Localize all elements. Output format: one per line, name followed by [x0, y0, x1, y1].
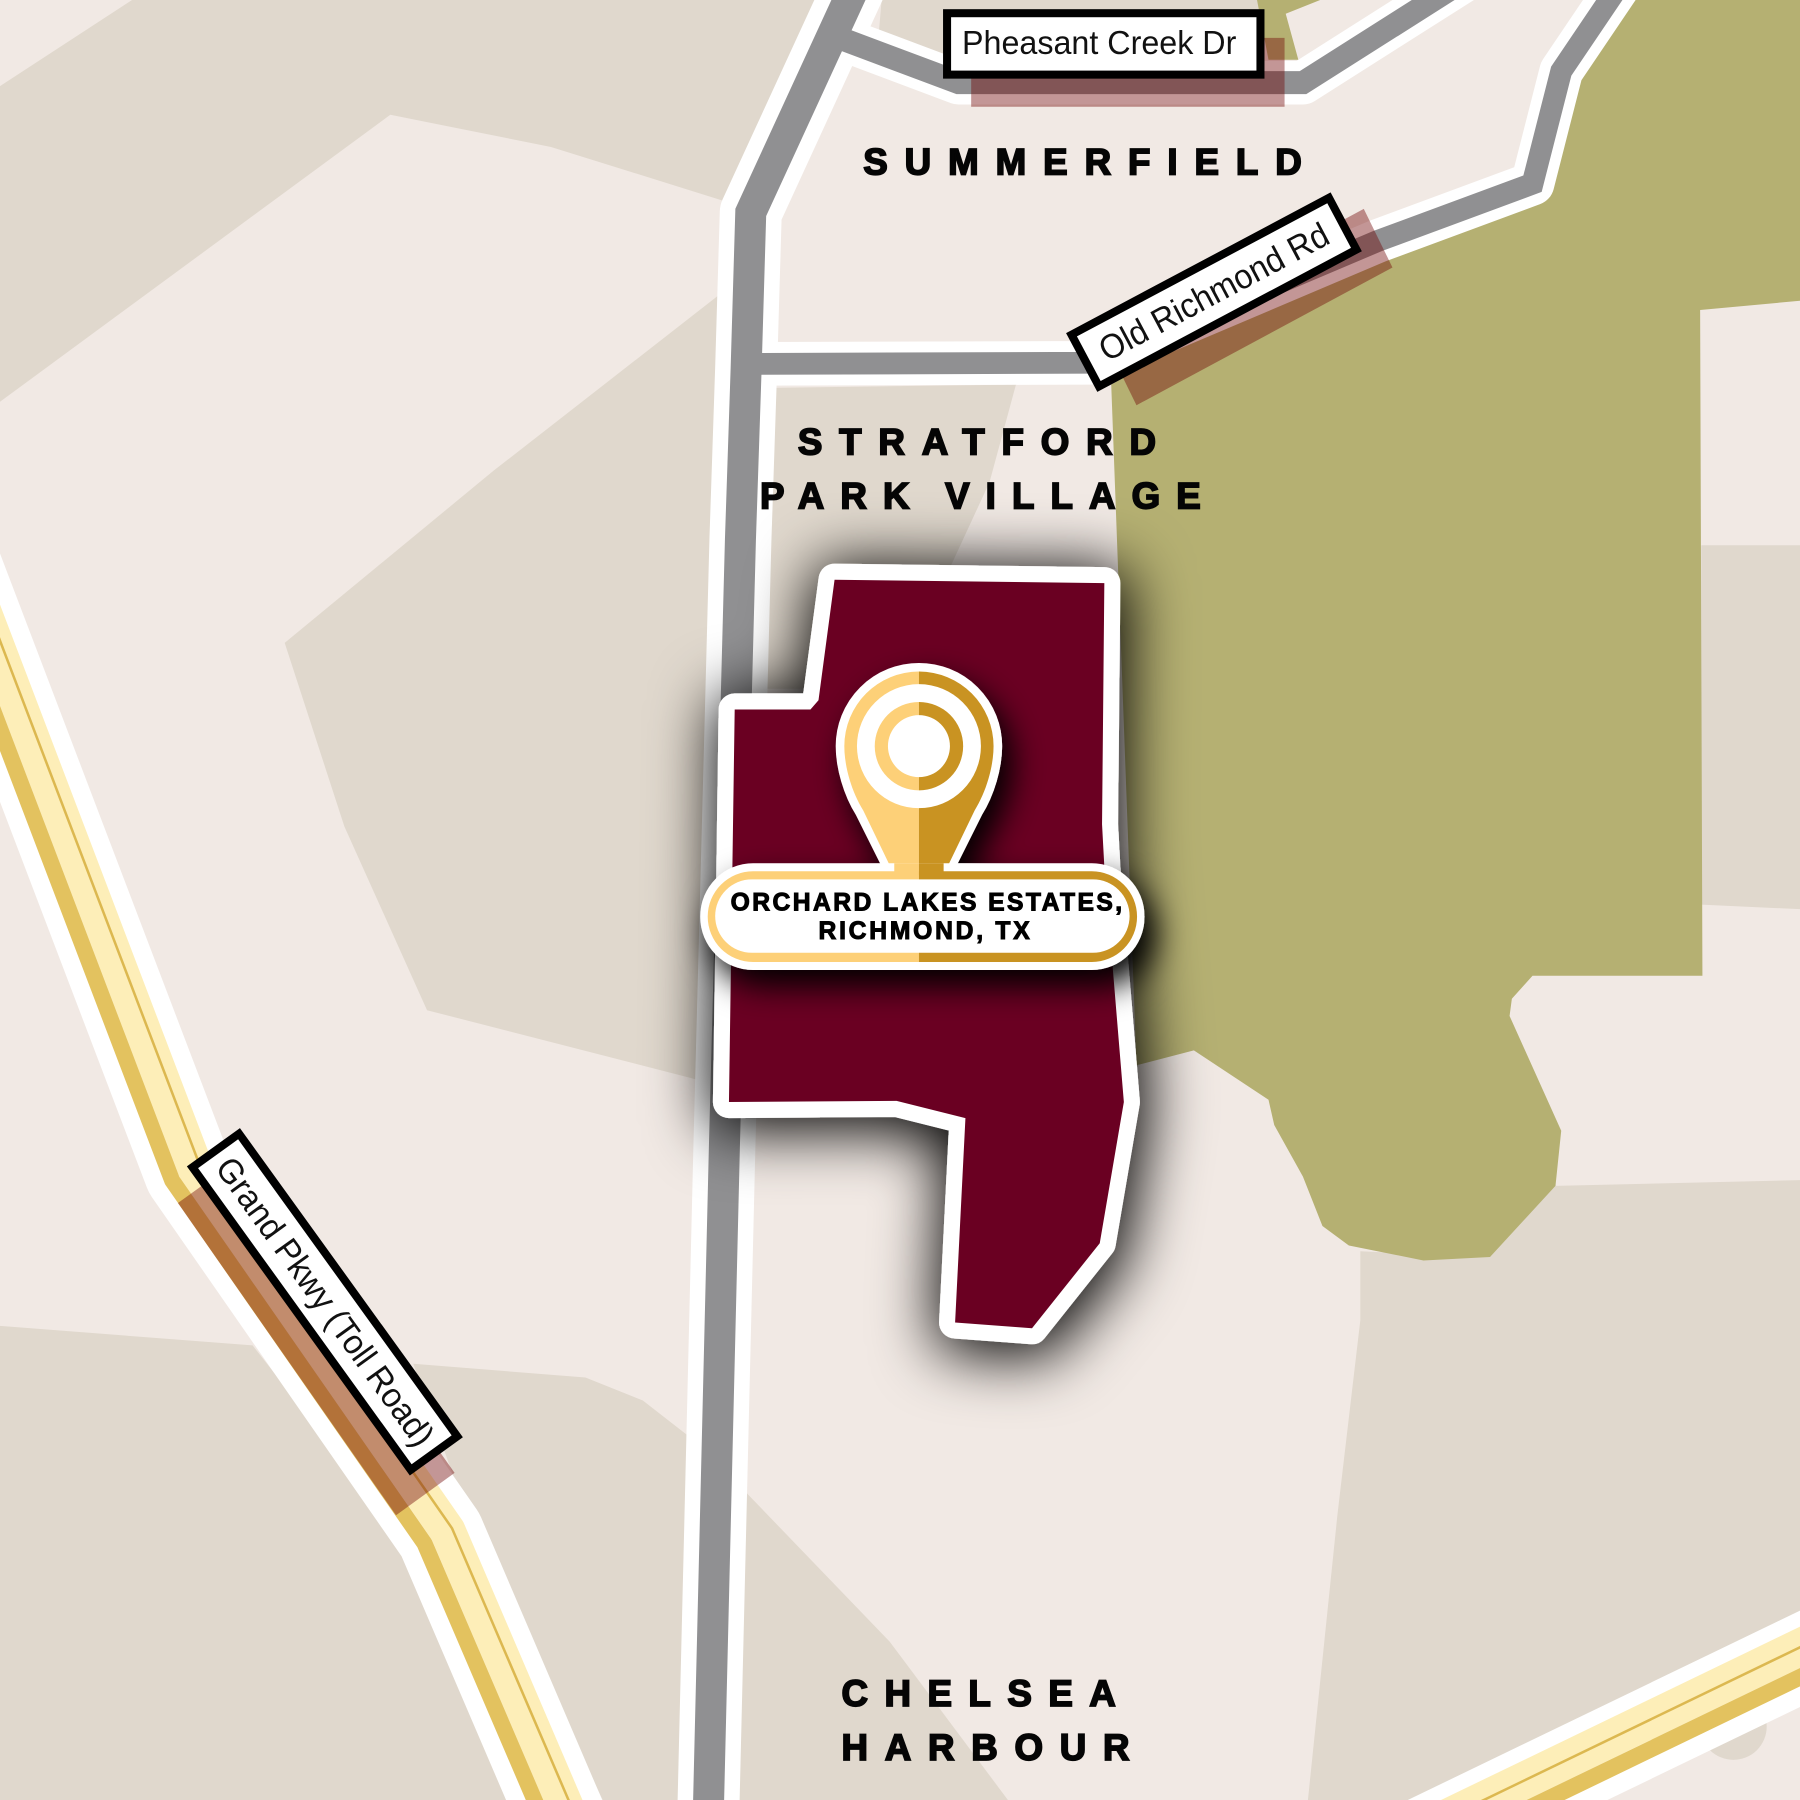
highway: Grand Parkway [0, 402, 592, 1800]
label: Old Richmond Rd [1071, 198, 1392, 405]
icon: map pin [844, 672, 994, 875]
label: Old Richmond Rd: Old Richmond Rd [1093, 216, 1336, 369]
label: Pheasant Creek Dr: Pheasant Creek Dr [962, 25, 1236, 62]
neighborhood: Stratford Park Village: PARK VILLAGE [760, 476, 1201, 517]
label: Grand Pkwy (Toll Road): Grand Pkwy (Toll Road) [208, 1150, 441, 1454]
label: Pheasant Creek Dr [947, 13, 1285, 107]
neighborhood: Stratford Park Village [760, 422, 1201, 517]
green park area [1111, 0, 1800, 1260]
location pin and name badge [700, 672, 1145, 970]
neighborhood: Chelsea Harbour [841, 1673, 1130, 1768]
highway: lower right [1378, 1602, 1800, 1800]
name badge [700, 863, 1145, 970]
local roads [708, 0, 1621, 1800]
name badge: ORCHARD LAKES ESTATES, [731, 889, 1122, 916]
road casings [708, 0, 1621, 1800]
neighborhood: Chelsea Harbour: CHELSEA [841, 1673, 1116, 1714]
neighborhood: Summerfield: SUMMERFIELD [863, 141, 1302, 182]
property parcel [729, 580, 1124, 1328]
neighborhood: Chelsea Harbour: HARBOUR [841, 1727, 1130, 1768]
name badge: RICHMOND, TX [818, 918, 1030, 945]
neighborhood: Stratford Park Village: STRATFORD [798, 422, 1156, 463]
